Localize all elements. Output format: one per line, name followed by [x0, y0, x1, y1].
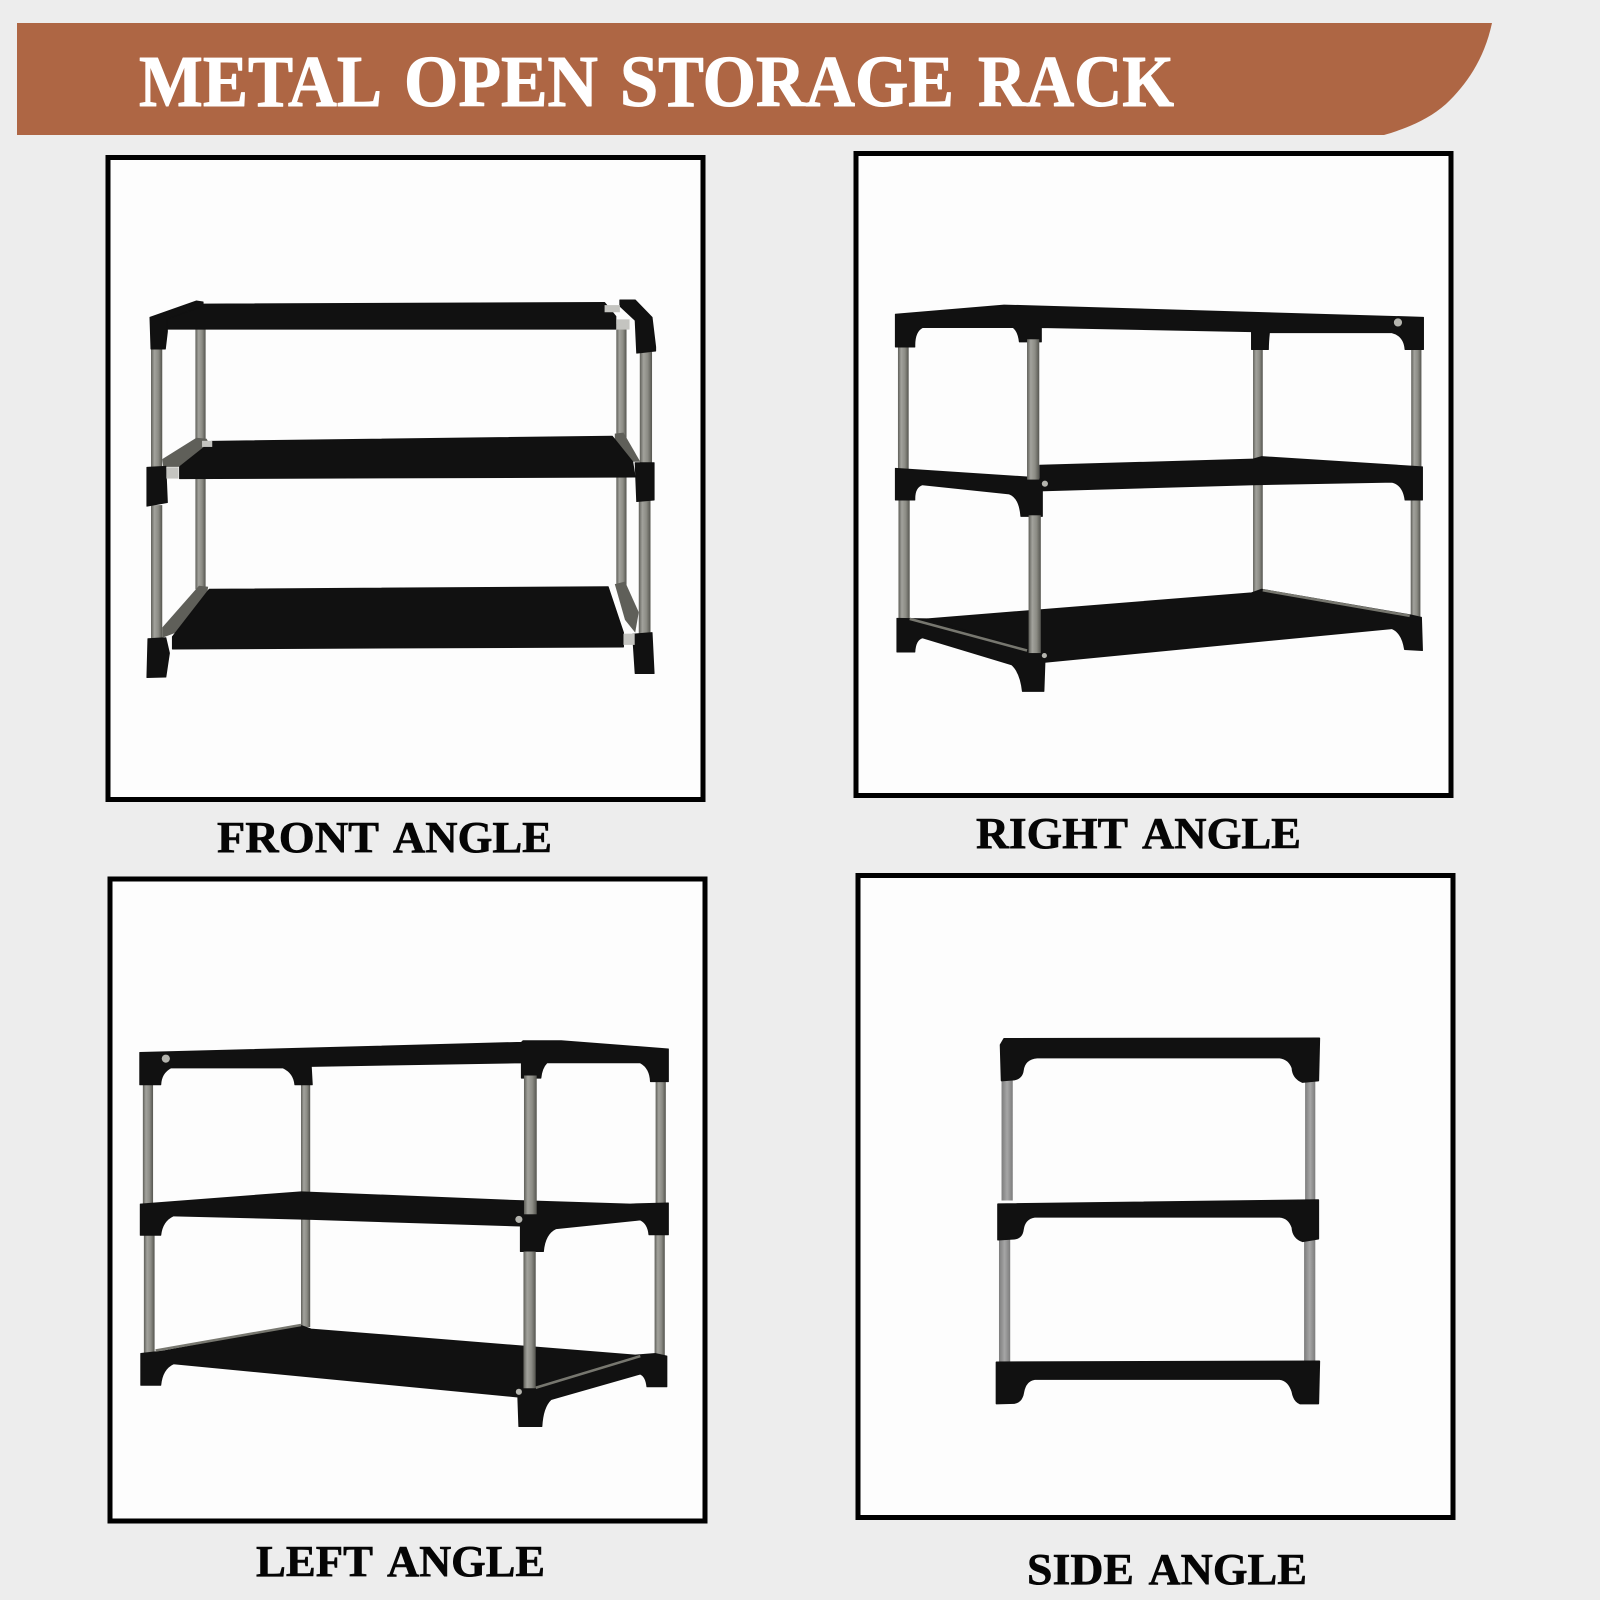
image: side view of rack — [996, 1038, 1319, 1404]
label: side angle: ANGLE — [1148, 1545, 1307, 1594]
title banner — [17, 23, 1492, 135]
title: OPEN — [404, 41, 598, 122]
panel: left angle — [110, 879, 705, 1521]
label: right angle — [976, 809, 1301, 858]
label: right angle: RIGHT — [976, 809, 1128, 858]
label: left angle: LEFT — [256, 1537, 373, 1586]
label: side angle — [1027, 1545, 1307, 1594]
label: left angle: ANGLE — [387, 1537, 545, 1586]
label: side angle: SIDE — [1027, 1545, 1134, 1594]
image: right view of rack — [895, 305, 1423, 691]
label: left angle — [256, 1537, 545, 1586]
label: front angle: FRONT — [217, 813, 379, 862]
image: front view of rack — [147, 300, 656, 678]
panel: right angle — [856, 154, 1451, 796]
title: METAL — [139, 41, 382, 122]
panel: front angle — [108, 158, 703, 800]
label: right angle: ANGLE — [1142, 809, 1301, 858]
label: front angle — [217, 813, 552, 862]
image: left view of rack — [140, 1041, 668, 1427]
title: RACK — [978, 41, 1174, 122]
title — [139, 41, 1174, 122]
title: STORAGE — [620, 41, 954, 122]
panel: side angle — [858, 876, 1453, 1518]
label: front angle: ANGLE — [393, 813, 552, 862]
